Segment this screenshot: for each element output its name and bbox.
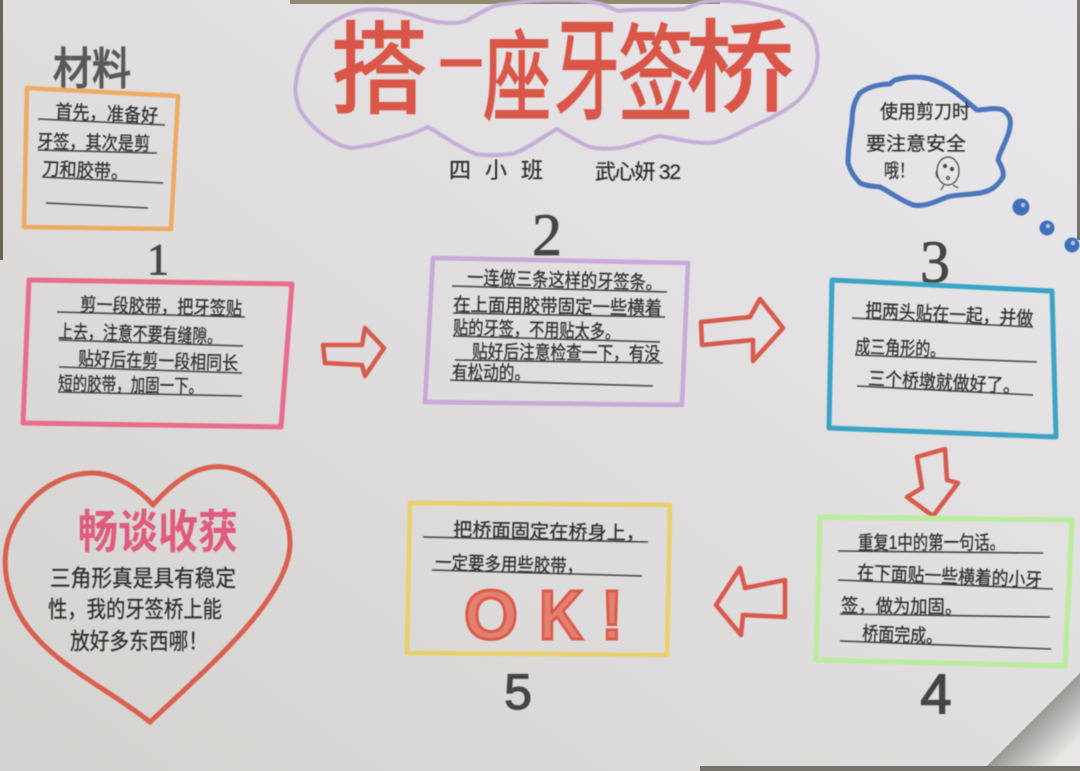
heart text: [48, 565, 236, 654]
panel: step 1: [23, 280, 292, 427]
bubble text: 要注意安全: [866, 133, 966, 155]
heart panel: reading takeaways: [5, 467, 290, 722]
bubble text: 使用剪刀时: [880, 101, 970, 123]
title: 搭一座牙签桥: 座: [483, 24, 551, 133]
step number 4: 4: [920, 662, 952, 725]
step 5 text: 一定要多用些胶带，: [435, 552, 583, 578]
step number 5: 5: [504, 664, 532, 720]
class and author line: [449, 158, 681, 184]
title: 搭一座牙签桥: 一: [439, 28, 483, 106]
heart text: 性，我的牙签桥上能: [48, 596, 222, 622]
step 1 text: [57, 294, 245, 398]
materials text: 刀和胶带。: [42, 158, 129, 184]
step 4 text: 签，做为加固。: [841, 595, 962, 619]
step 3 text: [852, 300, 1037, 398]
bubble text: 哦！: [884, 160, 914, 182]
icon: egg character: [936, 157, 959, 190]
step 2 text: [450, 267, 667, 386]
step 2 text: 贴的牙签，不用贴太多。: [453, 317, 620, 344]
step number 3: 3: [920, 229, 950, 295]
class and author line: 四小班: [449, 158, 543, 183]
step 1 text: 剪一段胶带，把牙签贴: [80, 294, 242, 320]
OK! hollow lettering: !: [601, 576, 623, 654]
OK! hollow lettering: O: [464, 576, 518, 654]
step 1 text: 上去，注意不要有缝隙。: [58, 321, 222, 348]
step 3 text: 三个桥墩就做好了。: [868, 368, 1021, 398]
step 2 text: 一连做三条这样的牙签条。: [467, 267, 662, 294]
panel: step 4: [816, 517, 1072, 666]
title: 搭一座牙签桥: 牙: [555, 11, 619, 134]
title cloud outline: [295, 0, 818, 155]
step number 1: 1: [147, 235, 169, 284]
panel: materials: [24, 88, 178, 229]
title: 搭一座牙签桥: 签: [618, 18, 694, 135]
step 2 text: 在上面用胶带固定一些横着: [453, 294, 662, 320]
arrow: step 2 to step 3: [701, 299, 783, 361]
heart heading: 畅谈收获: [78, 506, 238, 558]
step 5 text: 把桥面固定在桥身上，: [453, 519, 645, 545]
title: 搭一座牙签桥: 桥: [686, 14, 794, 125]
step 5 text: [423, 519, 648, 578]
arrow: step 1 to step 2: [323, 328, 384, 376]
step 3 text: 成三角形的。: [855, 336, 946, 361]
panel: step 5: [407, 503, 670, 655]
step 4 text: 重复1中的第一句话。: [858, 532, 1005, 554]
step 4 text: 在下面贴一些横着的小牙: [857, 562, 1043, 592]
thought bubble: safety tip: [848, 77, 1010, 205]
bubble text: [866, 101, 970, 182]
materials text: 牙签，其次是剪: [37, 131, 150, 155]
OK! hollow lettering: [464, 576, 623, 654]
heart text: 三角形真是具有稳定: [50, 565, 236, 591]
step number 2: 2: [532, 202, 562, 268]
thought bubble trail dots: [1012, 198, 1080, 252]
title: 搭一座牙签桥: 搭: [331, 14, 427, 126]
step 2 text: 有松动的。: [452, 362, 530, 384]
step 4 text: 桥面完成。: [862, 623, 943, 648]
step 3 text: 把两头贴在一起，并做: [865, 300, 1034, 330]
materials text: 首先，准备好: [55, 101, 159, 127]
step 2 text: 贴好后注意检查一下，有没: [472, 341, 660, 366]
heading: materials: 材料: [53, 45, 131, 94]
OK! hollow lettering: K: [539, 576, 583, 654]
panel: step 3: [829, 280, 1056, 437]
title: 搭一座牙签桥: [331, 11, 794, 135]
materials text: [37, 101, 165, 208]
step 4 text: [838, 532, 1053, 649]
arrow: step 4 to step 5: [716, 568, 785, 635]
arrow: step 3 to step 4: [907, 449, 958, 516]
class and author line: 武心妍 32: [595, 161, 681, 184]
heart text: 放好多东西哪！: [70, 628, 208, 654]
step 1 text: 短的胶带，加固一下。: [58, 373, 203, 398]
panel: step 2: [425, 258, 688, 405]
step 1 text: 贴好后在剪一段相同长: [78, 348, 238, 375]
